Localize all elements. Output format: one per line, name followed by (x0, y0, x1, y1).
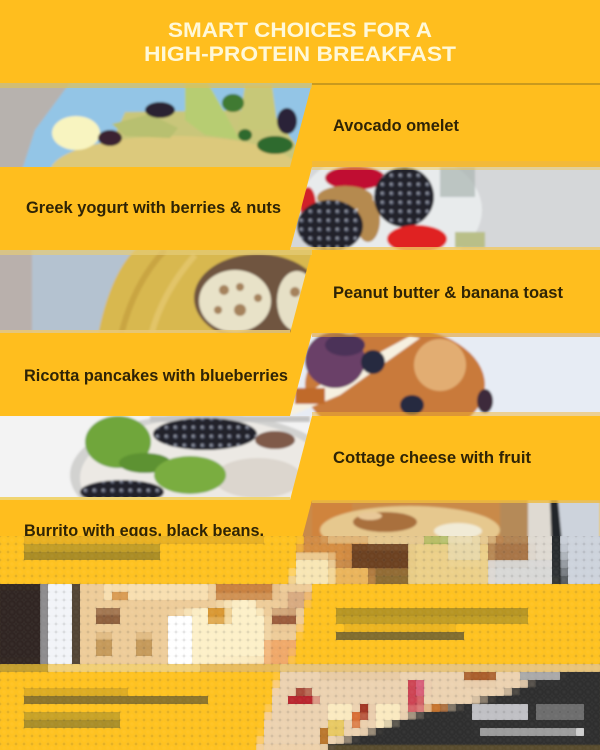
photo: avocado omelet (0, 83, 312, 167)
title (144, 19, 456, 66)
photo: burrito upper part (302, 500, 600, 536)
mosaic artwork (0, 536, 600, 750)
pixelated lower section (0, 536, 600, 750)
label: avocado omelet: Avocado omelet (333, 117, 459, 135)
label: peanut butter toast: Peanut butter & banana toast (333, 284, 563, 302)
photo: cottage cheese (0, 416, 312, 500)
title: SMART CHOICES FOR A (168, 19, 432, 42)
band edge highlights (0, 83, 600, 503)
label: greek yogurt: Greek yogurt with berries & nuts (26, 199, 281, 217)
label: ricotta pancakes: Ricotta pancakes with blueberries (24, 367, 288, 385)
title: HIGH-PROTEIN BREAKFAST (144, 43, 456, 66)
photo: peanut butter toast (0, 250, 312, 333)
dot screen overlay (0, 536, 600, 750)
photo: ricotta pancakes (290, 333, 600, 416)
label: cottage cheese: Cottage cheese with fruit (333, 449, 532, 467)
photo: greek yogurt (290, 167, 600, 250)
label: burrito: Burrito with eggs, black beans, (24, 522, 264, 540)
